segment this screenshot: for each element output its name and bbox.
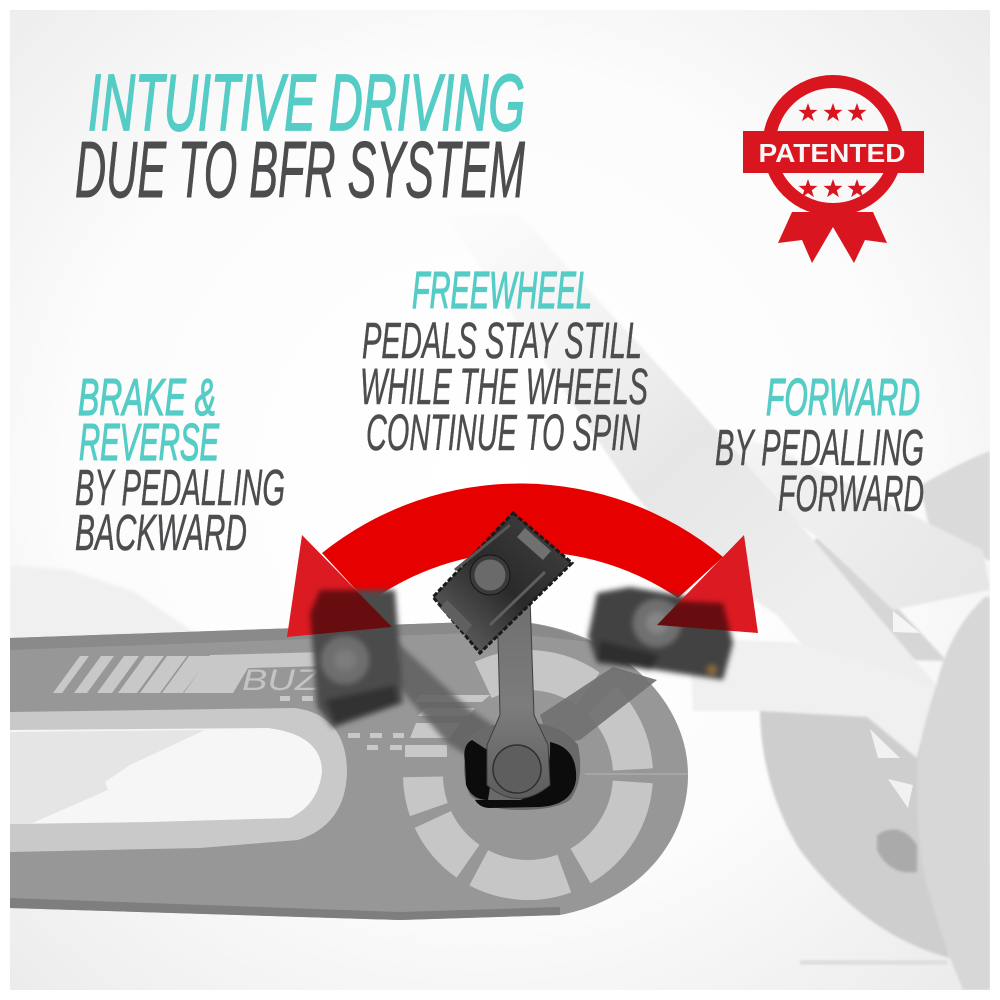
arrow body xyxy=(322,484,723,603)
text block: freewheel: WHILE THE WHEELS xyxy=(360,358,648,415)
blurred pedal left xyxy=(310,590,403,728)
crank with socket xyxy=(464,597,580,810)
chain guard brand text: BUZZY xyxy=(242,664,370,697)
text block: brake and reverse: REVERSE xyxy=(79,414,220,472)
chain guard stripes xyxy=(53,650,400,693)
text block: freewheel: CONTINUE TO SPIN xyxy=(366,404,640,461)
text block: brake and reverse xyxy=(75,369,285,561)
text block: brake and reverse: BRAKE & xyxy=(78,369,216,427)
text block: freewheel xyxy=(360,262,648,461)
badge: patented xyxy=(743,82,924,263)
text block: forward xyxy=(715,369,924,522)
arrow head right xyxy=(657,535,758,633)
pedal top xyxy=(433,513,572,653)
blurred pedal right xyxy=(588,587,733,680)
text block: brake and reverse: BACKWARD xyxy=(75,504,247,561)
title: DUE TO BFR SYSTEM xyxy=(75,125,525,214)
arrow head left xyxy=(287,535,392,637)
ghost crank arms xyxy=(390,643,657,770)
faded kart in background xyxy=(10,215,990,990)
chain guard ring segments xyxy=(380,627,676,923)
title xyxy=(75,58,525,214)
text block: freewheel: PEDALS STAY STILL xyxy=(362,312,642,369)
chain guard xyxy=(10,621,688,923)
badge: patented: PATENTED xyxy=(758,138,906,168)
text block: freewheel: FREEWHEEL xyxy=(412,262,592,320)
title: INTUITIVE DRIVING xyxy=(88,58,525,147)
text block: brake and reverse: BY PEDALLING xyxy=(75,459,285,516)
chain guard small rectangles xyxy=(280,695,490,757)
